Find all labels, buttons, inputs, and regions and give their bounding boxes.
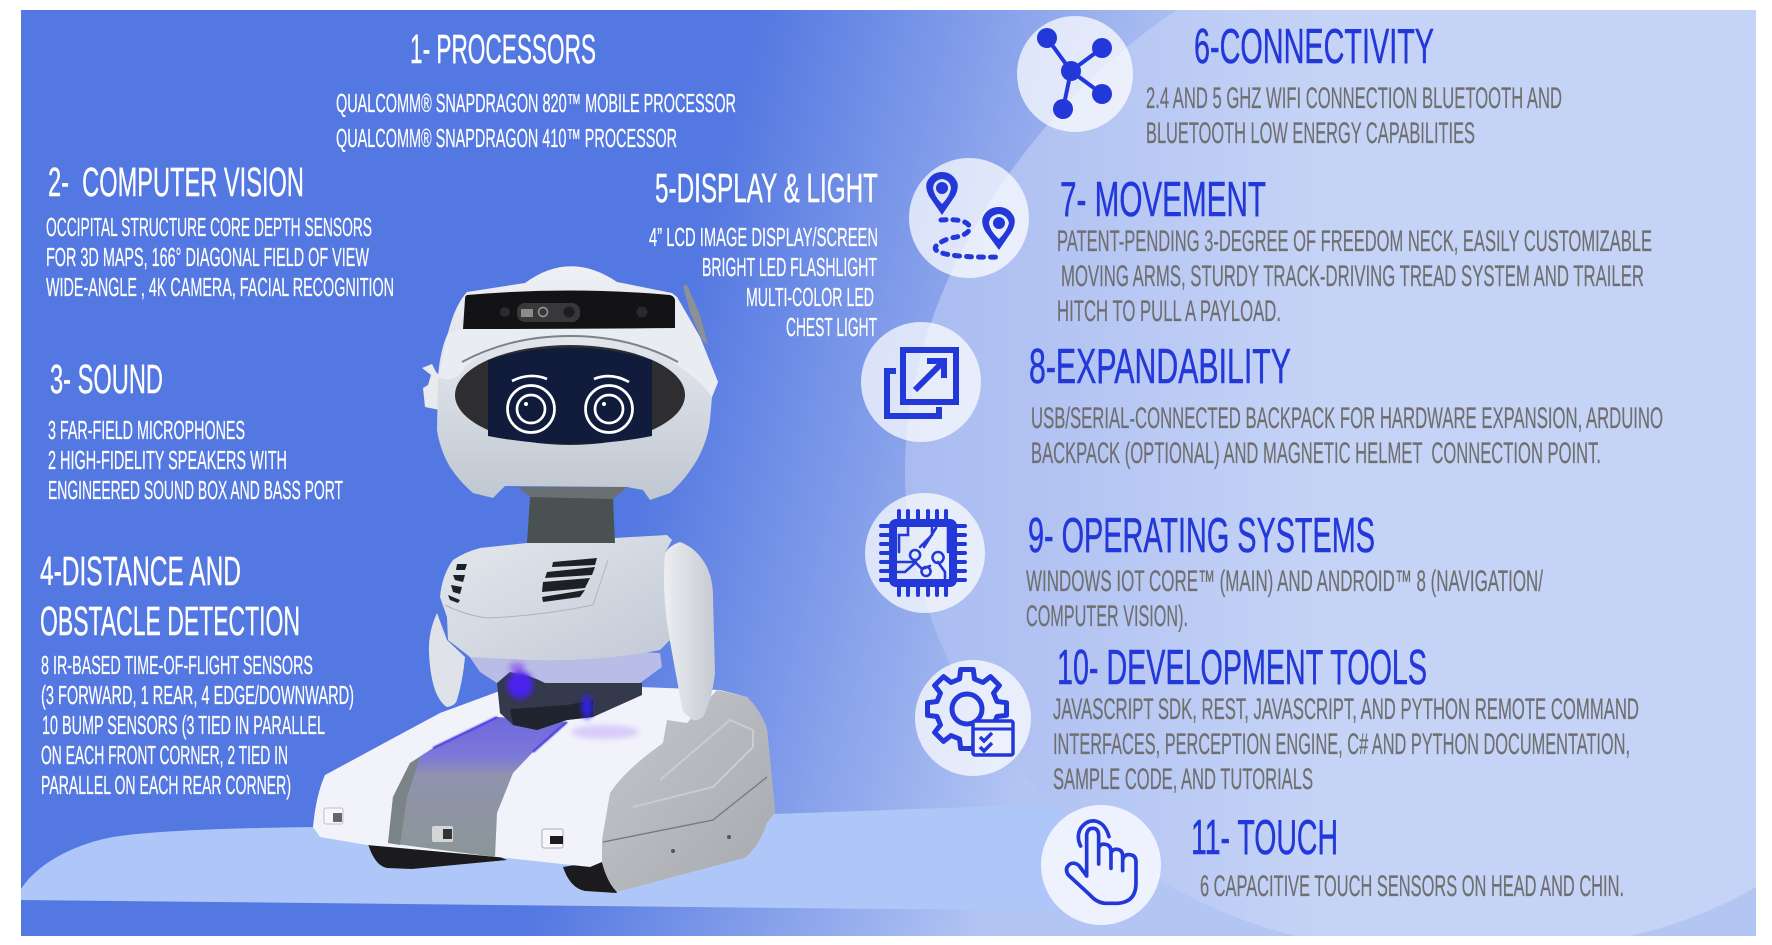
- left track: [368, 844, 507, 869]
- section 2: computer vision: FOR 3D MAPS, 166° DIAGONAL FIELD OF VIEW: [46, 242, 369, 272]
- icon: connectivity network: [1017, 16, 1133, 132]
- floor wave: [21, 804, 1060, 910]
- section 10: development tools: SAMPLE CODE, AND TUTORIALS: [1053, 763, 1313, 796]
- icon: expandability windows: [861, 322, 981, 442]
- section 1: processors: [336, 26, 736, 153]
- base body: [313, 687, 775, 892]
- head antenna: [683, 285, 708, 345]
- robot: [313, 266, 775, 893]
- section 4: distance and obstacle detection: 10 BUMP SENSORS (3 TIED IN PARALLEL: [42, 710, 325, 740]
- section 6: connectivity: BLUETOOTH LOW ENERGY CAPABILITIES: [1146, 117, 1475, 150]
- section 5: display and light: [649, 165, 878, 342]
- base sensors: [324, 808, 563, 848]
- section 4: distance and obstacle detection: PARALLEL ON EACH REAR CORNER): [41, 770, 291, 800]
- section 11: touch: 11- TOUCH: [1191, 811, 1338, 865]
- robot dark core: [497, 672, 642, 730]
- section 2: computer vision: [46, 159, 394, 302]
- section 6: connectivity: [1146, 20, 1562, 150]
- robot neck: [517, 487, 627, 543]
- section 2: computer vision: OCCIPITAL STRUCTURE CORE DEPTH SENSORS: [46, 212, 372, 242]
- section 8: expandability: 8-EXPANDABILITY: [1029, 340, 1291, 394]
- section 7: movement: HITCH TO PULL A PAYLOAD.: [1057, 295, 1281, 328]
- section 4: distance and obstacle detection: OBSTACLE DETECTION: [40, 598, 300, 644]
- large light circle: [905, 10, 1756, 936]
- base side panel: [602, 690, 775, 892]
- section 2: computer vision: WIDE-ANGLE , 4K CAMERA, FACIAL RECOGNITION: [46, 272, 394, 302]
- section 9: operating systems: 9- OPERATING SYSTEMS: [1028, 509, 1375, 563]
- section 3: sound: 3 FAR-FIELD MICROPHONES: [48, 415, 245, 445]
- torso vents: [448, 558, 597, 603]
- side panel lines: [603, 777, 767, 842]
- section 4: distance and obstacle detection: 4-DISTANCE AND: [40, 548, 241, 594]
- section 3: sound: 2 HIGH-FIDELITY SPEAKERS WITH: [48, 445, 287, 475]
- robot underbody: [457, 645, 662, 683]
- section 5: display and light: 5-DISPLAY & LIGHT: [655, 165, 878, 211]
- section 5: display and light: CHEST LIGHT: [786, 312, 877, 342]
- section 9: operating systems: [1026, 509, 1543, 633]
- section 4: distance and obstacle detection: [40, 548, 354, 800]
- section 4: distance and obstacle detection: ON EACH FRONT CORNER, 2 TIED IN: [41, 740, 288, 770]
- section 6: connectivity: 6-CONNECTIVITY: [1194, 20, 1434, 74]
- section 4: distance and obstacle detection: (3 FORWARD, 1 REAR, 4 EDGE/DOWNWARD): [41, 680, 354, 710]
- section 4: distance and obstacle detection: 8 IR-BASED TIME-OF-FLIGHT SENSORS: [41, 650, 313, 680]
- icon: movement pins: [909, 158, 1029, 278]
- purple glow: [505, 647, 639, 739]
- section 11: touch: [1191, 811, 1624, 903]
- section 5: display and light: BRIGHT LED FLASHLIGHT: [702, 252, 877, 282]
- section 10: development tools: 10- DEVELOPMENT TOOLS: [1057, 641, 1427, 695]
- section 7: movement: 7- MOVEMENT: [1060, 173, 1266, 227]
- icon: chip: [865, 493, 985, 613]
- robot torso: [440, 535, 672, 660]
- head shading: [438, 297, 718, 397]
- section 10: development tools: [1053, 641, 1639, 796]
- eyes: [508, 376, 632, 432]
- section 8: expandability: [1029, 340, 1663, 470]
- robot right arm: [664, 542, 715, 720]
- right track: [563, 860, 617, 893]
- section 9: operating systems: COMPUTER VISION).: [1026, 600, 1188, 633]
- section 1: processors: 1- PROCESSORS: [410, 26, 596, 72]
- section 2: computer vision: 2- COMPUTER VISION: [48, 159, 304, 205]
- section 1: processors: QUALCOMM® SNAPDRAGON 820™ MOBILE PROCESSOR: [336, 88, 736, 118]
- section 5: display and light: 4” LCD IMAGE DISPLAY/SCREEN: [649, 222, 878, 252]
- robot head: [437, 266, 718, 500]
- robot left arm: [429, 613, 465, 707]
- section 3: sound: [48, 356, 343, 505]
- section 1: processors: QUALCOMM® SNAPDRAGON 410™ PROCESSOR: [336, 123, 677, 153]
- left ear knob: [422, 364, 440, 410]
- section 3: sound: 3- SOUND: [50, 356, 163, 402]
- base center stripe: [388, 717, 567, 857]
- section 7: movement: [1057, 173, 1652, 328]
- icon: touch hand: [1041, 805, 1161, 925]
- icon: gear and checklist: [915, 660, 1031, 776]
- face screen: [455, 336, 685, 445]
- camera visor: [463, 290, 675, 329]
- section 3: sound: ENGINEERED SOUND BOX AND BASS PORT: [48, 475, 343, 505]
- section 5: display and light: MULTI-COLOR LED: [746, 282, 874, 312]
